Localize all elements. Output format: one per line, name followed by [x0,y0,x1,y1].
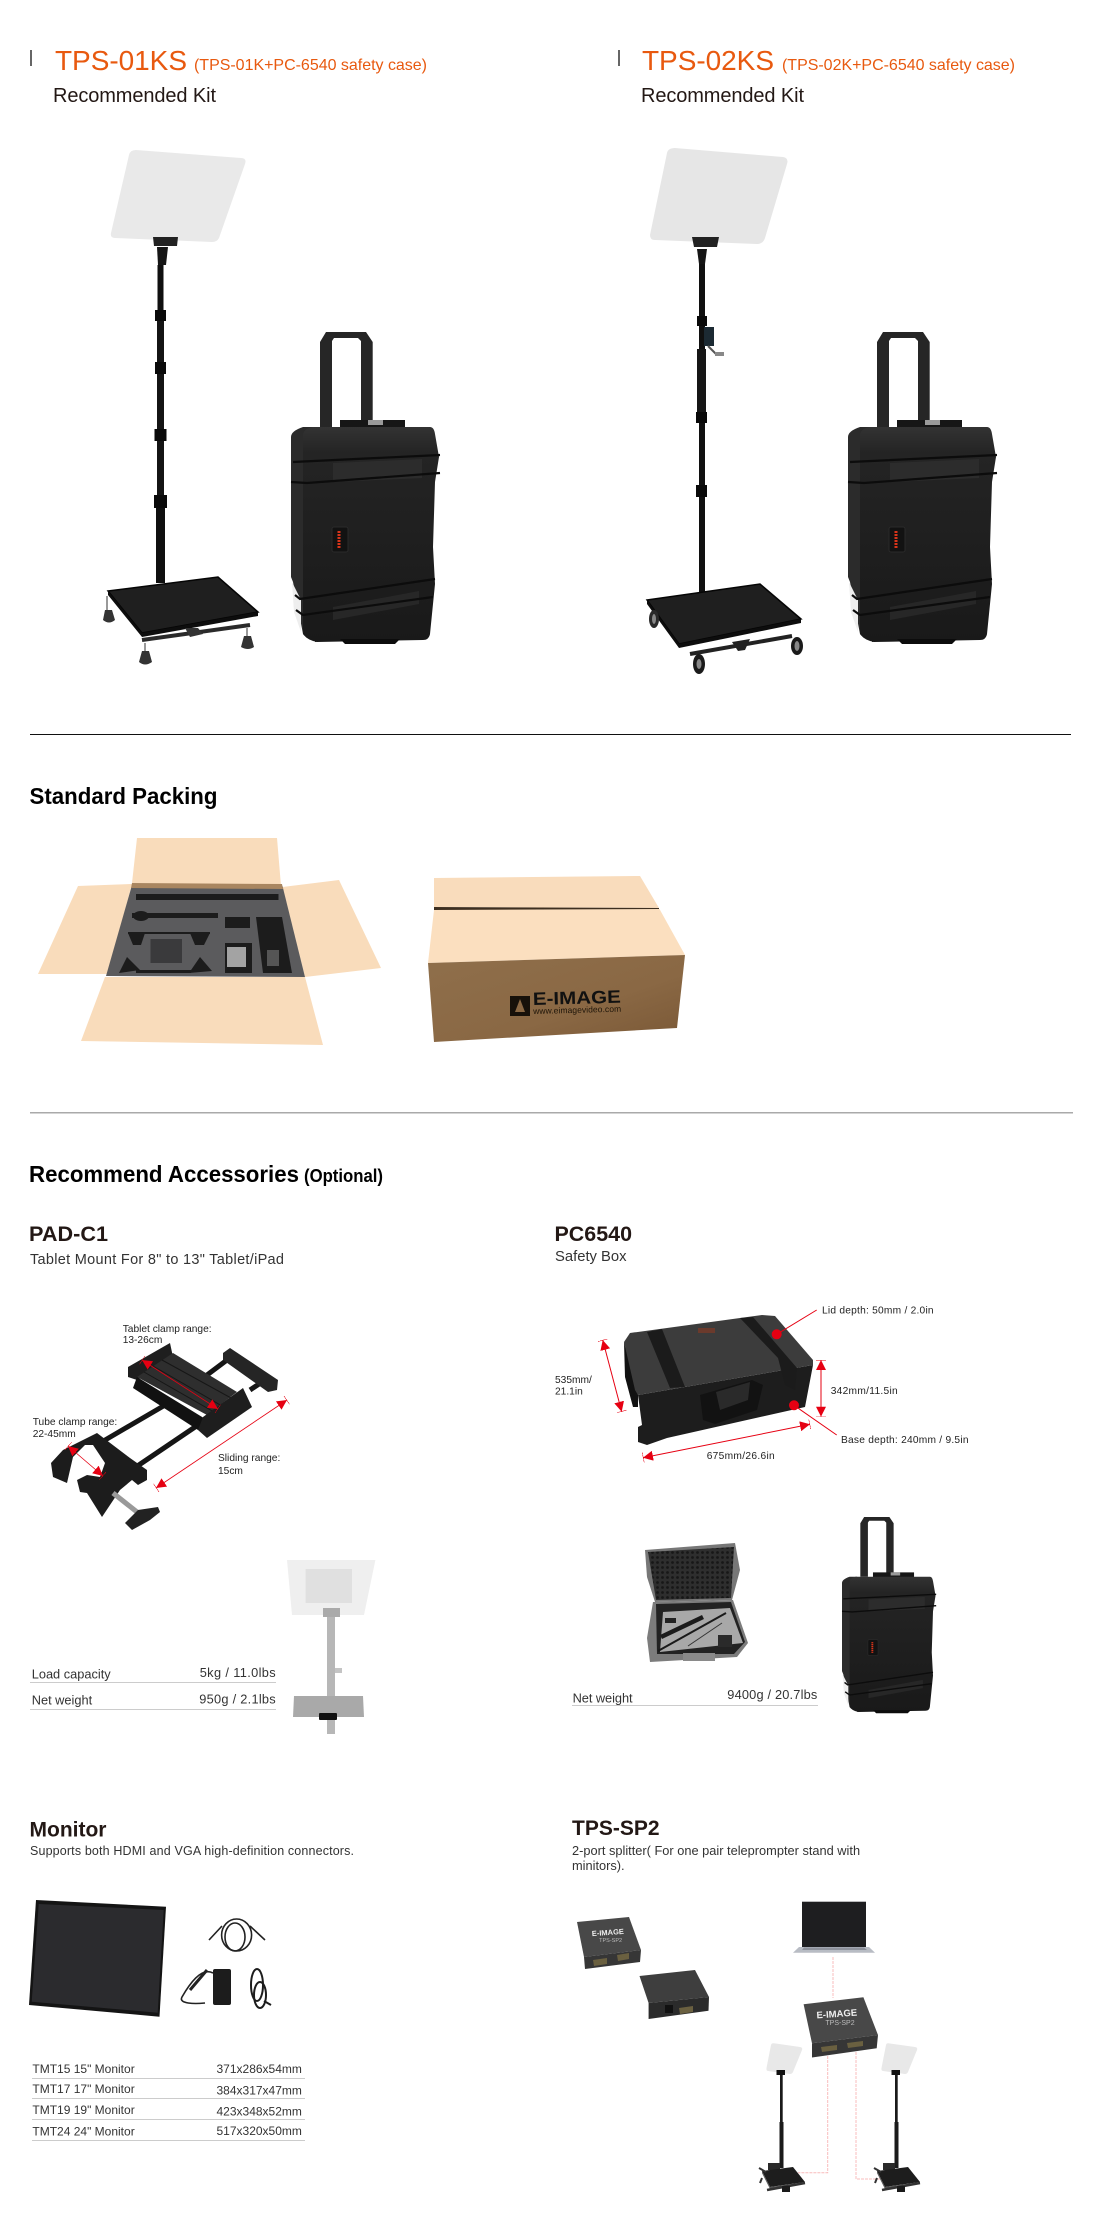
monitor size table [32,2062,305,2141]
label: recommended kit: Recommended Kit [53,85,216,107]
callout: tablet clamp range: Tablet clamp range: [123,1324,212,1335]
callout: length: 675mm/26.6in [707,1451,775,1462]
title: TPS-01KS: TPS-01KS [55,45,187,76]
panel: TPS-01KS kit [30,45,440,664]
subtitle: (TPS-01K+PC-6540 safety case) [194,57,427,74]
connection lines [798,1957,882,2179]
description: Tablet Mount For 8" to 13" Tablet/iPad [30,1252,284,1268]
splitter front view: TPS-SP2 [599,1938,622,1944]
spec table [30,1665,276,1710]
callout: tablet clamp range: 13-26cm [123,1335,162,1346]
callout: tube clamp range: Tube clamp range: [33,1417,117,1428]
monitor size table: TMT15 15" Monitor [32,2062,135,2076]
subtitle: (TPS-02K+PC-6540 safety case) [782,57,1015,74]
closed carton with logo [428,876,685,1042]
spec table: 9400g / 20.7lbs [727,1687,817,1702]
callout: tube clamp range: 22-45mm [33,1429,76,1440]
divider [30,1112,1073,1114]
monitor size table: 371x286x54mm [216,2062,302,2076]
heading suffix: optional: (Optional) [304,1166,383,1186]
callout: width: 535mm/ [555,1375,592,1386]
panel: PC6540 [554,1223,968,1713]
callout: height: 342mm/11.5in [831,1386,898,1397]
spec table: 950g / 2.1lbs [199,1692,276,1706]
product name: PC6540 [554,1223,632,1246]
open carton with foam [38,838,381,1045]
logo wordmark: www.eimagevideo.com [532,1004,621,1016]
teleprompter stand on feet [103,150,258,664]
case with dimensions [624,1315,813,1445]
label: recommended kit: Recommended Kit [641,85,804,107]
spec table [572,1687,818,1706]
callout: width: 21.1in [555,1386,583,1398]
callout: lid depth: Lid depth: 50mm / 2.0in [822,1306,934,1317]
monitor size table: 517x320x50mm [216,2124,302,2138]
teleprompter stand on casters [647,148,803,674]
product name: TPS-SP2 [572,1817,660,1840]
splitter rear view [640,1970,709,2019]
left stand [759,2043,805,2192]
panel: monitor [29,1819,354,2141]
monitor size table: TMT19 19" Monitor [32,2103,135,2117]
description: minitors). [572,1858,625,1873]
splitter centre: E-IMAGE [816,2008,857,2021]
tablet mount product drawing [51,1343,278,1530]
dimension arrows [68,1360,287,1488]
logo wordmark [532,987,621,1016]
title: TPS-02KS: TPS-02KS [642,45,774,76]
divider [30,734,1071,735]
monitor size table: 384x317x47mm [216,2083,302,2097]
open case with foam [645,1543,748,1662]
description: Safety Box [555,1249,627,1265]
description: Supports both HDMI and VGA high-definition connectors. [30,1844,354,1858]
power adapter [181,1969,231,2005]
description: 2-port splitter( For one pair teleprompter stand with [572,1843,860,1858]
monitor size table: TMT24 24" Monitor [32,2125,135,2139]
monitor size table: TMT17 17" Monitor [32,2082,135,2096]
carton flaps [38,838,381,1045]
product name: Monitor [30,1819,106,1842]
logo wordmark: E-IMAGE [533,987,621,1009]
accent bar [30,50,32,66]
spec table: Net weight [573,1690,633,1706]
HDMI cable [209,1919,265,1951]
safety case upright [291,332,440,644]
safety case upright [842,1517,936,1713]
monitor screen [29,1900,166,2017]
spec table: Net weight [32,1692,93,1708]
monitor size table: 423x348x52mm [216,2105,302,2119]
dimension arrows [603,1340,821,1458]
accent bar [618,50,620,66]
right stand [874,2043,920,2192]
callout: base depth: Base depth: 240mm / 9.5in [841,1435,968,1446]
foam tray [106,885,305,977]
product name: PAD-C1 [29,1223,108,1246]
splitter front view: E-IMAGE [592,1927,624,1938]
spec table: Load capacity [32,1666,111,1682]
callout: sliding range: Sliding range: [218,1453,280,1464]
spec table: 5kg / 11.0lbs [200,1665,276,1680]
logo mark [510,996,530,1016]
panel: TPS-SP2 [572,1817,920,2192]
power cord [251,1969,271,2008]
callout: sliding range: 15cm [218,1466,243,1477]
splitter centre [804,1997,878,2058]
heading: standard packing: Standard Packing [30,783,218,809]
lid and base depth pointers [772,1310,837,1435]
safety case upright [848,332,997,644]
panel: PAD-C1 [29,1223,375,1734]
faded stand with tablet mount [287,1560,375,1734]
heading: recommend accessories: Recommend Accessories [29,1161,299,1187]
splitter centre: TPS-SP2 [825,2020,855,2027]
laptop [793,1902,875,1953]
splitter front view [577,1917,641,1969]
panel: TPS-02KS kit [618,45,1015,674]
